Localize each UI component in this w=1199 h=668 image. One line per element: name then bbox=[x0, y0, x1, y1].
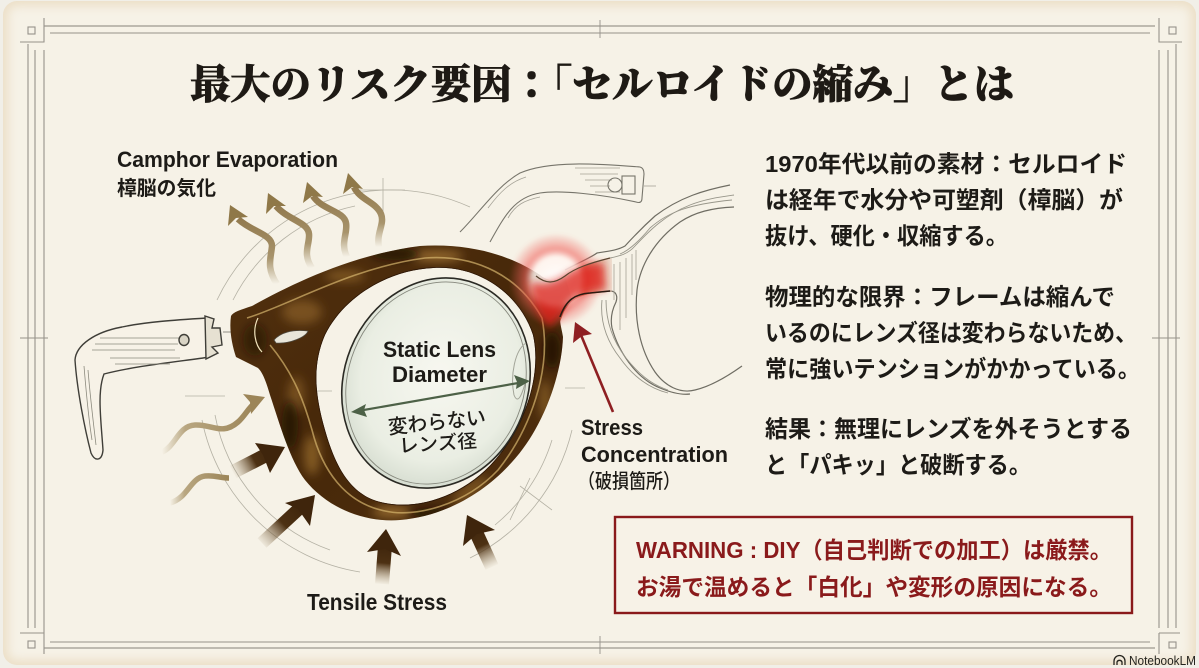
wavy arrow lower bbox=[170, 476, 229, 503]
heading: camphor evaporation: 樟脳の気化 bbox=[117, 177, 216, 200]
dark arrow 2 bbox=[262, 495, 315, 543]
text block: result: と「パキッ」と破断する。 bbox=[765, 452, 1031, 478]
text block: physical limit bbox=[765, 284, 1140, 382]
lens labels: レンズ径 bbox=[398, 429, 478, 458]
tortoiseshell patches bbox=[243, 248, 561, 518]
text block: material: 1970年代以前の素材：セルロイド bbox=[765, 151, 1127, 177]
rim bridge bbox=[535, 258, 612, 332]
lens bbox=[311, 249, 561, 517]
wavy arrow upper bbox=[162, 394, 265, 452]
evaporation arrow 4 bbox=[343, 173, 382, 247]
text block: physical limit: いるのにレンズ径は変わらないため、 bbox=[765, 319, 1137, 346]
stress glow bbox=[509, 233, 610, 328]
right lens rim sketch bbox=[563, 185, 742, 394]
tensile stress arrows bbox=[162, 394, 495, 584]
text block: result bbox=[765, 415, 1132, 478]
stress concentration label: Concentration bbox=[581, 442, 728, 467]
text block: material: は経年で水分や可塑剤（樟脳）が bbox=[765, 186, 1124, 213]
dark arrow 4 bbox=[463, 515, 495, 567]
warning callout: WARNING : DIY（自己判断での加工）は厳禁。 bbox=[636, 537, 1112, 563]
text block: physical limit: 常に強いテンションがかかっている。 bbox=[765, 355, 1140, 382]
NotebookLM watermark: NotebookLM bbox=[1129, 654, 1196, 668]
lens labels: Diameter bbox=[392, 362, 487, 387]
text block: physical limit: 物理的な限界：フレームは縮んで bbox=[765, 284, 1115, 310]
camphor evaporation arrows bbox=[228, 173, 382, 284]
dark arrow 1 bbox=[233, 443, 285, 473]
title: 最大のリスク要因：「セルロイドの縮み」とは bbox=[190, 62, 1014, 107]
left temple sketch bbox=[75, 316, 232, 459]
stress pointer arrow bbox=[573, 322, 613, 412]
lens labels bbox=[383, 337, 496, 458]
rivet bbox=[274, 330, 308, 343]
warning callout: お湯で温めると「白化」や変形の原因になる。 bbox=[636, 574, 1112, 600]
evaporation arrow 2 bbox=[266, 193, 312, 268]
warning callout bbox=[615, 517, 1132, 613]
glasses front rim bbox=[230, 246, 612, 520]
dark arrow 3 bbox=[367, 529, 401, 584]
tensile stress label: Tensile Stress bbox=[307, 589, 447, 615]
right temple sketch bbox=[460, 164, 656, 242]
evaporation arrow 3 bbox=[303, 182, 347, 257]
evaporation arrow 1 bbox=[228, 205, 277, 284]
lens diameter arrow bbox=[351, 375, 530, 417]
heading: camphor evaporation bbox=[117, 147, 338, 200]
rim body bbox=[230, 246, 572, 520]
stress concentration label: （破損箇所） bbox=[578, 470, 680, 493]
text block: result: 結果：無理にレンズを外そうとする bbox=[765, 415, 1132, 442]
stress concentration label: Stress bbox=[581, 415, 643, 440]
lens labels: Static Lens bbox=[383, 337, 496, 362]
stress concentration label bbox=[578, 415, 728, 493]
lens labels: 変わらない bbox=[387, 406, 487, 439]
text block: material bbox=[765, 151, 1127, 249]
text block: material: 抜け、硬化・収縮する。 bbox=[765, 223, 1008, 249]
construction circles bbox=[185, 178, 585, 572]
heading: camphor evaporation: Camphor Evaporation bbox=[117, 147, 338, 172]
